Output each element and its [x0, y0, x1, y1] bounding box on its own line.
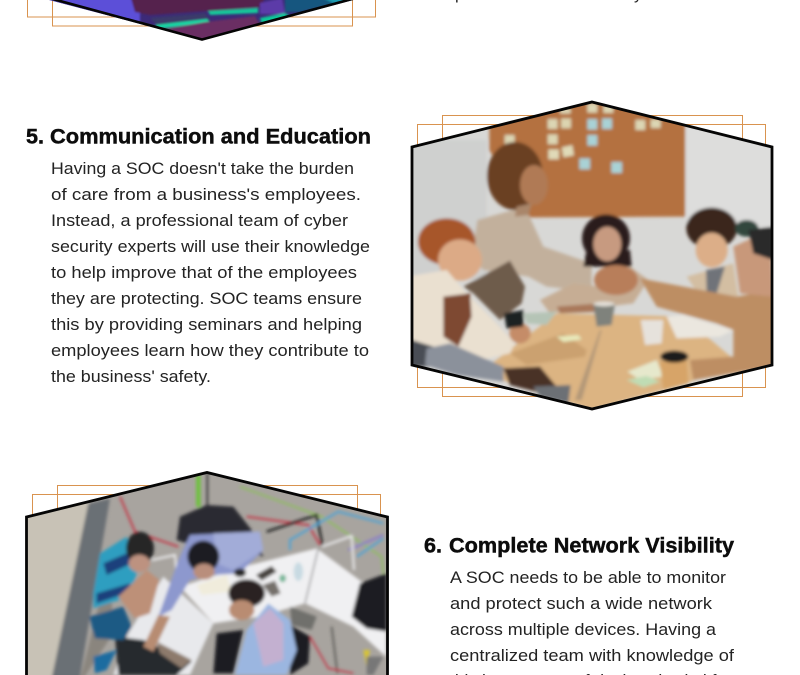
- handshake: [594, 265, 638, 295]
- text block: network visibility paragraph: and protect such a wide network: [450, 595, 713, 613]
- text block: communication paragraph: of care from a business's employees.: [51, 186, 361, 204]
- text block: network visibility paragraph: [450, 569, 734, 675]
- text block: communication paragraph: this by providing seminars and helping: [51, 316, 362, 334]
- standing woman: [472, 207, 592, 292]
- text block: network visibility paragraph: across multiple devices. Having a: [450, 621, 717, 639]
- heading: 6. Complete Network Visibility: Complete Network Visibility: [449, 534, 734, 558]
- text block: network visibility paragraph: A SOC needs to be able to monitor: [450, 569, 727, 587]
- black hexagon outline: [26, 472, 388, 675]
- text block: communication paragraph: to help improve that of the employees: [51, 264, 357, 282]
- photo: three colleagues around laptop: [28, 474, 386, 675]
- text block: communication paragraph: employees learn how they contribute to: [51, 342, 369, 360]
- heading: 6. Complete Network Visibility: 6.: [424, 534, 442, 558]
- front man: [213, 630, 243, 673]
- plant: [735, 220, 758, 237]
- decorative gold frames: [28, 0, 376, 26]
- text block: communication paragraph: [51, 160, 370, 386]
- seated woman center: [582, 214, 630, 262]
- red-haired man: [418, 218, 475, 265]
- heading: 5. Communication and Education: Communication and Education: [50, 126, 371, 148]
- text block: network visibility paragraph: centralized team with knowledge of: [450, 647, 734, 665]
- text block: communication paragraph: Instead, a professional team of cyber: [51, 212, 349, 230]
- phones and bottle: [256, 566, 277, 581]
- text block: communication paragraph: the business' safety.: [51, 368, 211, 386]
- photo: team shaking hands at table: [413, 104, 771, 408]
- photo: neon illustration crop: [49, 0, 353, 38]
- black chair: [177, 505, 263, 557]
- decorative gold frames: [32, 486, 380, 675]
- white desk surfaces: [180, 548, 386, 657]
- black hexagon outline: [412, 102, 772, 409]
- items on table: [504, 310, 523, 329]
- backpack: [352, 573, 387, 632]
- laptop on desk: [115, 637, 192, 675]
- cork board: [489, 100, 685, 217]
- heading: 5. Communication and Education: 5.: [26, 126, 44, 148]
- text fragment: descenders of previous paragraph: [455, 0, 643, 3]
- black hexagon edge: [38, 0, 367, 40]
- panel: section 4 photo remnant: [28, 0, 376, 45]
- text block: communication paragraph: they are protecting. SOC teams ensure: [51, 290, 362, 308]
- text block: communication paragraph: security experts will use their knowledge: [51, 238, 370, 256]
- center man: [158, 532, 263, 617]
- table: [483, 313, 737, 410]
- man right: [640, 278, 773, 380]
- curly woman right: [686, 208, 737, 249]
- foreground arm laptop: [413, 338, 434, 368]
- panel: office overhead photo hexagon: [20, 460, 397, 675]
- decorative gold frames: [418, 116, 766, 396]
- left man: [93, 537, 137, 608]
- stools and floor details: [290, 607, 317, 630]
- text block: communication paragraph: Having a SOC doesn't take the burden: [51, 160, 354, 178]
- panel: meeting photo hexagon: [410, 100, 774, 410]
